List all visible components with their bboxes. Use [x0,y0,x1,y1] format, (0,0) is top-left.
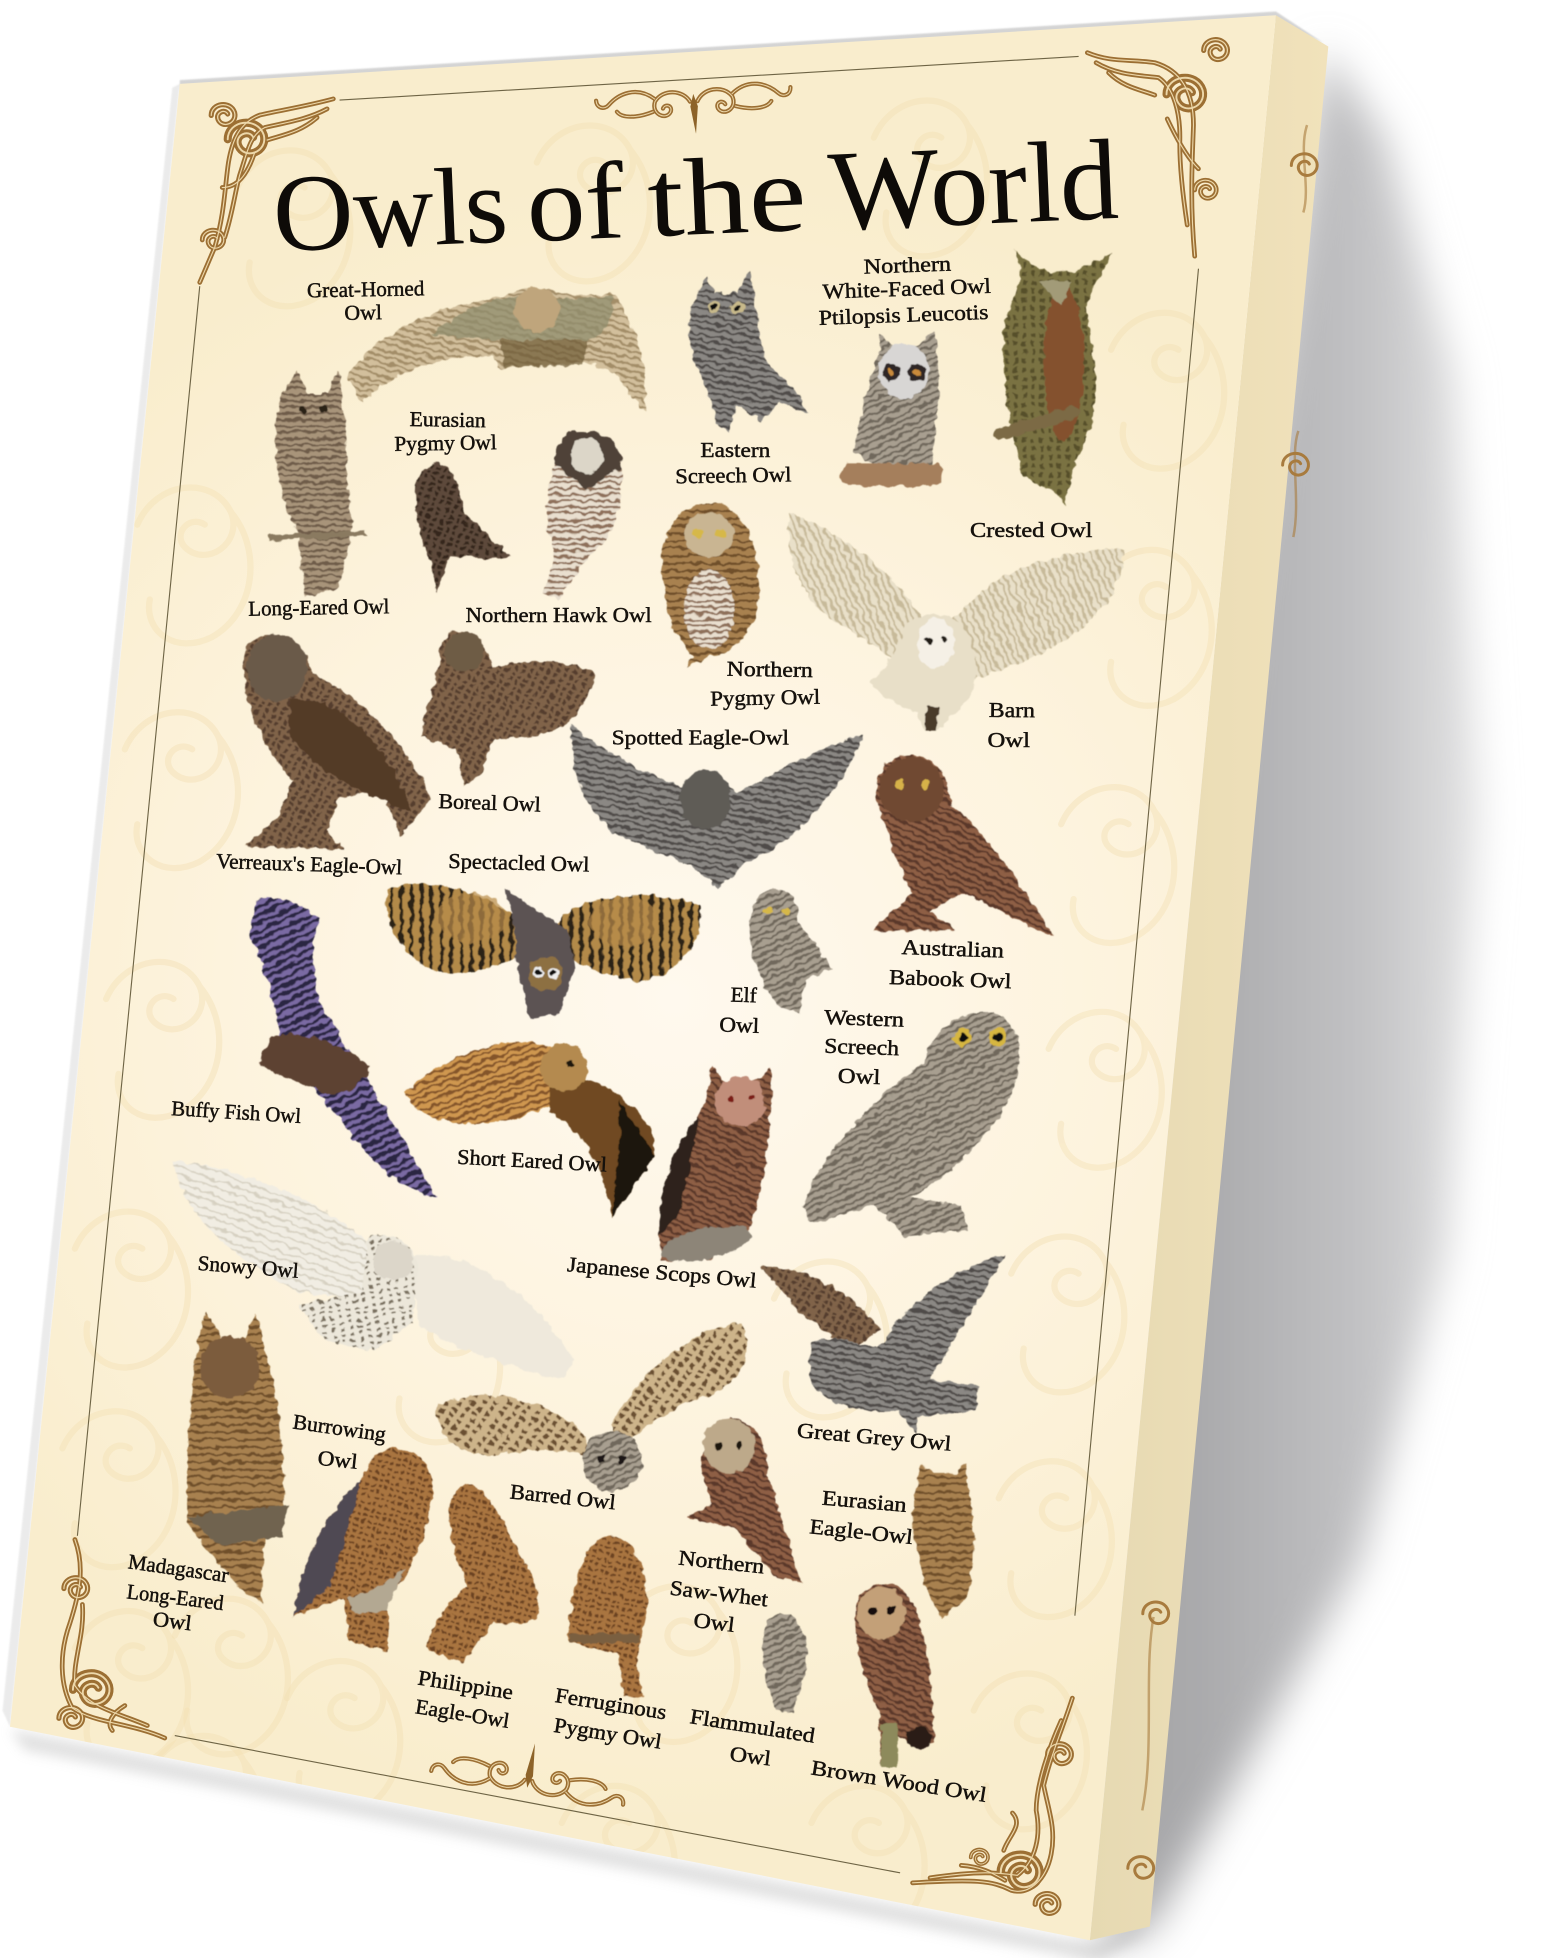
owl: long-eared [268,371,366,597]
label: madagascar long-eared owl: Madagascar [127,1549,230,1587]
label: burrowing owl: Owl [317,1446,359,1474]
label: great-horned owl [307,276,425,325]
label: eurasian pygmy owl: Pygmy Owl [394,430,497,456]
label: eurasian eagle-owl [808,1486,914,1549]
owl: burrowing [293,1448,432,1651]
owl: boreal [422,631,594,787]
label: barn owl: Barn [989,698,1036,722]
label: eurasian eagle-owl: Eurasian [821,1486,908,1517]
label: western screech owl [824,1005,905,1089]
title [271,116,1121,275]
label: snowy owl: Snowy Owl [197,1251,300,1283]
owl: northern pygmy [662,503,759,668]
label: northern saw-whet owl [669,1546,769,1637]
label: northern white-faced owl [818,252,991,330]
label: ferruginous pygmy owl: Ferruginous [554,1683,668,1724]
owl: crested [1000,250,1112,506]
title: Owls [271,143,510,275]
label: flammulated owl [688,1704,817,1771]
label: eurasian pygmy owl [394,407,497,456]
title: the [645,132,809,260]
label: spectacled owl: Spectacled Owl [448,849,590,877]
label: northern pygmy owl: Northern [726,657,813,682]
label: burrowing owl [291,1410,388,1474]
label: barred owl: Barred Owl [509,1479,617,1514]
owl: eurasian eagle [914,1463,973,1617]
owl: brown wood [855,1583,934,1768]
label: short eared owl: Short Eared Owl [457,1145,608,1177]
label: western screech owl: Owl [838,1064,881,1089]
owl: flammulated [762,1614,806,1713]
owl: elf [750,889,834,1014]
label: brown wood owl: Brown Wood Owl [809,1755,988,1807]
label: long-eared owl: Long-Eared Owl [248,594,390,621]
owl: spotted eagle [571,724,864,887]
owl: australian boobook [874,756,1055,937]
label: spotted eagle-owl: Spotted Eagle-Owl [612,725,789,749]
label: western screech owl: Screech [824,1034,900,1060]
label: eastern screech owl: Screech Owl [675,462,792,488]
owl: ferruginous pygmy [568,1536,647,1696]
label: eurasian eagle-owl: Eagle-Owl [808,1514,914,1549]
frame lines [77,56,1198,1873]
label: japanese scops owl: Japanese Scops Owl [566,1252,758,1293]
ornament: bottom-right corner [913,1698,1072,1913]
label: madagascar long-eared owl: Owl [152,1607,193,1635]
label: northern white-faced owl: Ptilopsis Leucotis [818,300,989,330]
label: northern pygmy owl [710,657,820,711]
label: madagascar long-eared owl: Long-Eared [125,1579,225,1615]
owl: japanese scops [657,1065,772,1268]
ornament: top centre [596,81,793,141]
label: eastern screech owl: Eastern [700,438,771,462]
label: ferruginous pygmy owl: Pygmy Owl [552,1713,663,1754]
label: northern saw-whet owl: Saw-Whet [669,1576,769,1611]
owl: philippine eagle [427,1483,538,1663]
owl: eastern screech [689,272,809,432]
label: northern white-faced owl: Northern [863,252,952,279]
owl: great grey [762,1255,1005,1433]
label: flammulated owl: Flammulated [688,1704,817,1748]
owl: snowy [175,1161,574,1380]
owl: short-eared [406,1042,655,1217]
label: boreal owl: Boreal Owl [438,789,541,817]
label: northern hawk owl: Northern Hawk Owl [466,603,652,627]
label: barn owl [987,698,1036,752]
label: eurasian pygmy owl: Eurasian [409,407,486,432]
label: elf owl: Owl [719,1012,760,1038]
label: northern saw-whet owl: Owl [692,1608,736,1637]
owl: western screech [803,1011,1019,1236]
owl: spectacled [386,884,702,1018]
label: philippine eagle-owl: Philippine [416,1666,515,1704]
label: western screech owl: Western [824,1005,905,1032]
label: buffy fish owl: Buffy Fish Owl [171,1096,302,1128]
owl: great-horned [347,287,646,412]
title: World [826,116,1121,255]
label: northern saw-whet owl: Northern [677,1546,766,1579]
label: philippine eagle-owl: Eagle-Owl [414,1694,511,1733]
owl: northern hawk [543,431,622,599]
label: australian boobook owl [889,935,1012,993]
label: eastern screech owl [675,438,792,488]
label: flammulated owl: Owl [728,1742,772,1771]
label: great-horned owl: Owl [344,300,382,325]
label: ferruginous pygmy owl [552,1683,668,1754]
owl: barred [436,1324,747,1491]
owl: eurasian pygmy [416,462,509,593]
owl: northern saw-whet [687,1417,801,1583]
canvas side edge [1090,15,1328,1940]
label: barn owl: Owl [987,728,1030,752]
label: great grey owl: Great Grey Owl [796,1418,952,1456]
panel: poster face [10,15,1276,1942]
label: great-horned owl: Great-Horned [307,276,425,302]
owl: buffy fish [250,898,437,1199]
ornament: top-right corner [1087,40,1227,256]
owl: verreaux's eagle [243,634,431,849]
label: elf owl [719,982,760,1038]
owl: barn [788,512,1124,731]
ornament: bottom centre [430,1727,631,1811]
label: australian boobook owl: Babook Owl [889,965,1012,993]
label: verreaux's eagle-owl: Verreaux's Eagle-Owl [216,849,403,879]
label: madagascar long-eared owl [125,1549,230,1635]
label: burrowing owl: Burrowing [291,1410,388,1446]
label: philippine eagle-owl [414,1666,515,1733]
ornament: top-left corner [200,99,333,282]
ornament: bottom-left corner [59,1540,165,1738]
owl: madagascar long-eared [187,1311,287,1604]
owl: white-faced [841,332,941,486]
label: northern white-faced owl: White-Faced Owl [822,274,991,304]
title: of [524,139,627,265]
label: northern pygmy owl: Pygmy Owl [710,685,820,711]
label: elf owl: Elf [730,982,758,1007]
label: crested owl: Crested Owl [970,518,1092,542]
label: australian boobook owl: Australian [901,935,1005,963]
